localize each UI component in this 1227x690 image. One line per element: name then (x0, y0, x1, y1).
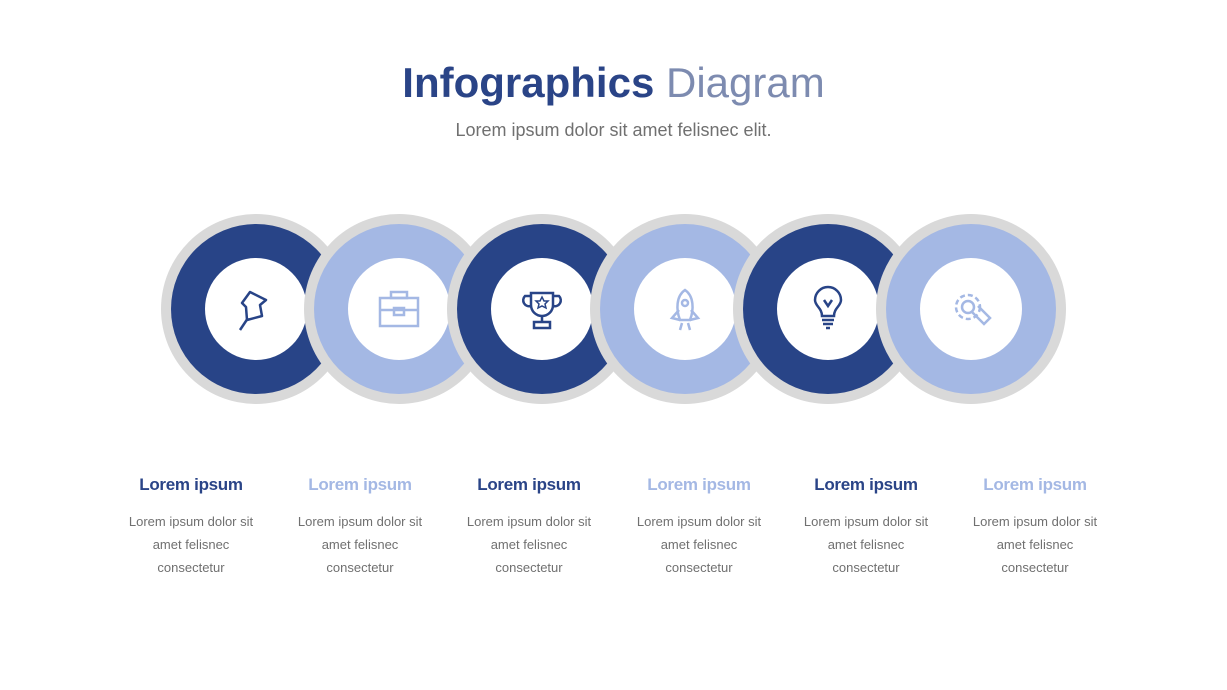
column 6: Lorem ipsum (983, 475, 1087, 494)
column 6: consectetur (1001, 560, 1069, 575)
circle 2: briefcase (304, 214, 494, 404)
column 4 (637, 475, 761, 575)
circle 1: pin (161, 214, 351, 404)
column 1: consectetur (157, 560, 225, 575)
column 2 (298, 475, 422, 575)
circle 4: rocket (590, 214, 780, 404)
column 6: amet felisnec (997, 537, 1073, 552)
column 2: amet felisnec (322, 537, 398, 552)
column 2: consectetur (326, 560, 394, 575)
column 4: amet felisnec (661, 537, 737, 552)
column 6 (973, 475, 1097, 575)
title: Infographics Diagram (402, 59, 825, 106)
column 1 (129, 475, 253, 575)
column 1: Lorem ipsum dolor sit (129, 514, 253, 529)
column 4: Lorem ipsum dolor sit (637, 514, 761, 529)
column 2: Lorem ipsum (308, 475, 412, 494)
column 5: amet felisnec (828, 537, 904, 552)
column 5: Lorem ipsum dolor sit (804, 514, 928, 529)
column 5: Lorem ipsum (814, 475, 918, 494)
column 3: Lorem ipsum (477, 475, 581, 494)
column 6: Lorem ipsum dolor sit (973, 514, 1097, 529)
circle 6: gear (876, 214, 1066, 404)
column 5: consectetur (832, 560, 900, 575)
column 1: amet felisnec (153, 537, 229, 552)
column 2: Lorem ipsum dolor sit (298, 514, 422, 529)
column 3: amet felisnec (491, 537, 567, 552)
column 5 (804, 475, 928, 575)
column 3 (467, 475, 591, 575)
column 1: Lorem ipsum (139, 475, 243, 494)
column 4: consectetur (665, 560, 733, 575)
column 3: consectetur (495, 560, 563, 575)
circle 3: trophy (447, 214, 637, 404)
subtitle: Lorem ipsum dolor sit amet felisnec elit. (455, 120, 772, 140)
circle 5: lightbulb (733, 214, 923, 404)
column 3: Lorem ipsum dolor sit (467, 514, 591, 529)
column 4: Lorem ipsum (647, 475, 751, 494)
